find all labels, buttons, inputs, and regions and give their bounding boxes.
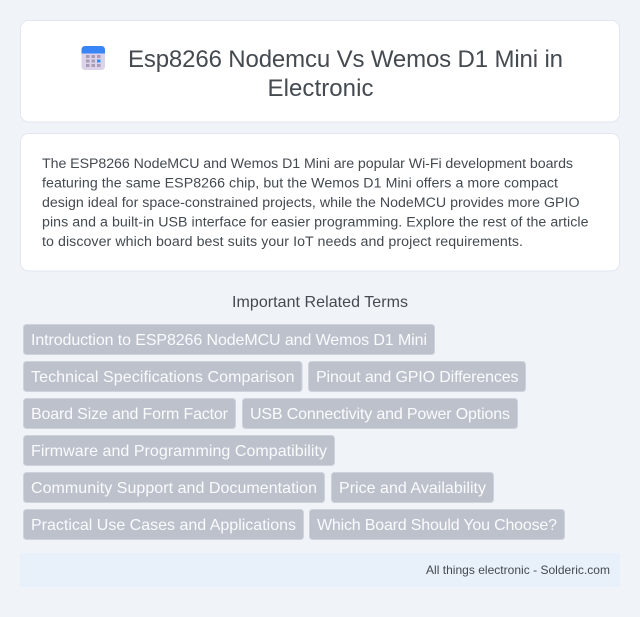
term chip: firmware: Firmware and Programming Compatibility <box>31 443 327 460</box>
term chip: use cases: Practical Use Cases and Applications <box>31 517 296 534</box>
term chip: use cases <box>24 510 304 540</box>
term chip: pinout <box>308 362 526 392</box>
panel: introduction text: pins and a built-in USB interface for easier programming. Explore the rest of the article <box>42 214 589 230</box>
title: Electronic <box>268 75 374 102</box>
term chip: community <box>24 472 324 502</box>
panel: introduction text: The ESP8266 NodeMCU and Wemos D1 Mini are popular Wi-Fi development boards <box>42 156 573 172</box>
footer <box>20 553 620 587</box>
heading: important related terms: Important Related Terms <box>232 294 408 311</box>
title <box>128 46 563 102</box>
term chip: board size <box>24 398 236 428</box>
term chip: introduction <box>24 324 434 354</box>
header panel <box>20 20 620 122</box>
panel: introduction text: to discover which board best suits your IoT needs and project requirements. <box>42 234 523 250</box>
icon: calendar <box>82 46 105 70</box>
term chip: firmware <box>24 436 334 466</box>
term chip: pinout: Pinout and GPIO Differences <box>316 369 518 386</box>
footer: All things electronic - Solderic.com <box>426 563 610 577</box>
term chip: price <box>332 472 494 502</box>
panel: introduction text: featuring the same ESP8266 chip, but the Wemos D1 Mini offers a more compact <box>42 176 558 192</box>
term chip: board size: Board Size and Form Factor <box>31 406 229 423</box>
term chip: which board: Which Board Should You Choose? <box>317 517 557 534</box>
term chip: technical specifications <box>24 362 302 392</box>
term chip: community: Community Support and Documentation <box>31 480 317 497</box>
panel: introduction text <box>20 134 620 271</box>
term chip: technical specifications: Technical Specifications Comparison <box>31 369 294 386</box>
term chip: which board <box>310 510 564 540</box>
term chip: usb <box>242 398 518 428</box>
panel: introduction text: design ideal for space-constrained projects, while the NodeMCU provides more GPIO <box>42 195 580 211</box>
title: Esp8266 Nodemcu Vs Wemos D1 Mini in <box>128 46 563 73</box>
term chip: usb: USB Connectivity and Power Options <box>250 406 510 423</box>
term chip: introduction: Introduction to ESP8266 NodeMCU and Wemos D1 Mini <box>31 332 427 349</box>
term chip: price: Price and Availability <box>339 480 486 497</box>
